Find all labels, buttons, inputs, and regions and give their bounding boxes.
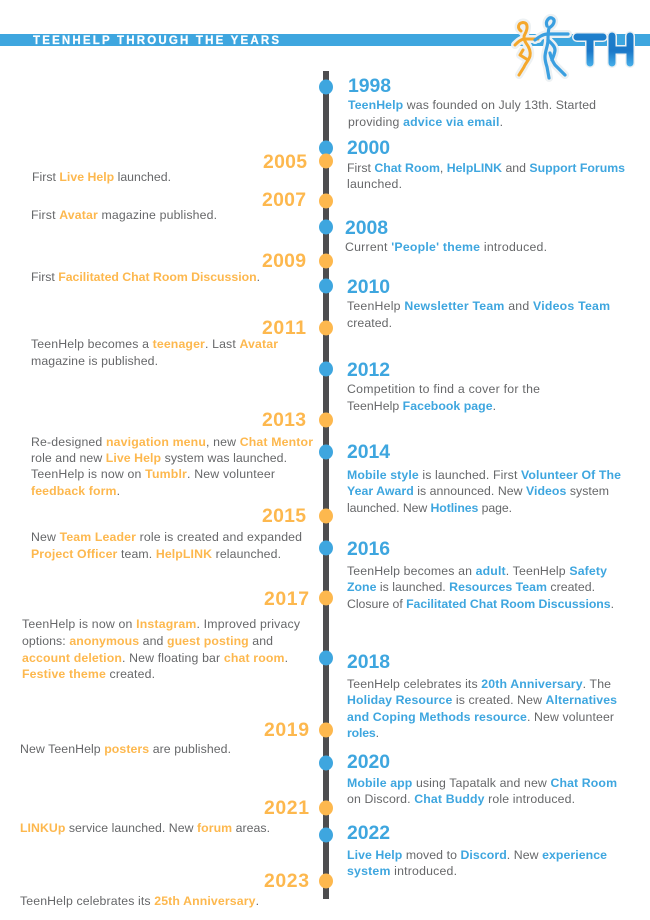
logo halo [515, 18, 630, 78]
entry 2000: 2000 [347, 137, 390, 159]
entry 2016: 2016 [347, 538, 390, 560]
entry 2009: First Facilitated Chat Room Discussion. [31, 270, 260, 284]
entry 2011: TeenHelp becomes a teenager. Last Avatar [31, 337, 278, 351]
entry 2017: account deletion. New floating bar chat room. [22, 651, 288, 665]
entry 2013: role and new Live Help system was launched. [31, 451, 287, 465]
entry 2023: TeenHelp celebrates its 25th Anniversary. [20, 894, 259, 908]
entry 2018: roles. [347, 726, 379, 740]
entry 2007 [31, 189, 306, 222]
entry 2021: LINKUp service launched. New forum areas. [20, 821, 270, 835]
title: TEENHELP THROUGH THE YEARS [33, 35, 279, 47]
entry 2020 [347, 751, 617, 806]
entry 2017: options: anonymous and guest posting and [22, 634, 273, 648]
entry 2005: 2005 [263, 151, 307, 173]
entry 2000: First Chat Room, HelpLINK and Support Forums [347, 161, 625, 175]
entry 2010 [347, 276, 610, 330]
entry 2016: Zone is launched. Resources Team created. [347, 580, 595, 594]
entry 2012: TeenHelp Facebook page. [347, 399, 496, 413]
orange figure [515, 22, 538, 75]
entry 2022: system introduced. [347, 864, 457, 878]
entry 2017 [22, 588, 309, 681]
entry 2014: Mobile style is launched. First Volunteer Of The [347, 468, 621, 482]
entry 2008: 2008 [345, 217, 388, 239]
entry 2018 [347, 651, 617, 740]
entry 2018: and Coping Methods resource. New volunteer [347, 710, 614, 724]
entry 2011: 2011 [262, 317, 306, 339]
blue figure [535, 18, 568, 78]
entry 2007: First Avatar magazine published. [31, 208, 217, 222]
entry 2010: created. [347, 316, 392, 330]
entry 2020: Mobile app using Tapatalk and new Chat Room [347, 776, 617, 790]
entry 2012 [347, 359, 540, 413]
entry 2021 [20, 797, 309, 835]
entry 2016: TeenHelp becomes an adult. TeenHelp Safety [347, 564, 607, 578]
entry 2016 [347, 538, 614, 611]
entry 2010: TeenHelp Newsletter Team and Videos Team [347, 299, 610, 313]
entry 2000: launched. [347, 177, 402, 191]
timeline dots: orange [319, 154, 333, 888]
entry 1998: 1998 [348, 75, 391, 97]
timeline dots: blue [319, 80, 333, 842]
entry 2020: on Discord. Chat Buddy role introduced. [347, 792, 575, 806]
entry 2014 [347, 441, 621, 515]
entry 2014: 2014 [347, 441, 390, 463]
entry 2019: New TeenHelp posters are published. [20, 742, 231, 756]
entry 2005 [32, 151, 307, 184]
entry 2009 [31, 250, 306, 284]
entry 2023 [20, 870, 309, 908]
timeline spine [323, 71, 329, 899]
entry 1998: providing advice via email. [348, 115, 503, 129]
entry 2014: launched. New Hotlines page. [347, 501, 512, 515]
entry 2013: TeenHelp is now on Tumblr. New volunteer [31, 467, 275, 481]
entry 2017: Festive theme created. [22, 667, 155, 681]
entry 2015 [31, 505, 306, 561]
entry 2022 [347, 822, 607, 878]
header bar [0, 34, 650, 46]
entry 2013: feedback form. [31, 484, 120, 498]
entry 2008: Current 'People' theme introduced. [345, 240, 547, 254]
entry 2000 [347, 137, 625, 191]
entry 2008 [345, 217, 547, 254]
entries: right column [345, 75, 625, 878]
entry 2014: Year Award is announced. New Videos system [347, 484, 609, 498]
entry 2013: Re-designed navigation menu, new Chat Mentor [31, 435, 313, 449]
entry 2019: 2019 [264, 719, 309, 741]
entry 1998 [348, 75, 596, 129]
entry 2022: Live Help moved to Discord. New experience [347, 848, 607, 862]
logo letters TH [577, 36, 630, 63]
entry 2015: 2015 [262, 505, 306, 527]
entry 2018: TeenHelp celebrates its 20th Anniversary. The [347, 677, 611, 691]
entries: left column [20, 151, 313, 908]
entry 2018: Holiday Resource is created. New Alternatives [347, 693, 617, 707]
entry 2023: 2023 [264, 870, 309, 892]
entry 2019 [20, 719, 309, 756]
entry 2017: TeenHelp is now on Instagram. Improved privacy [22, 617, 301, 631]
entry 2022: 2022 [347, 822, 390, 844]
entry 2007: 2007 [262, 189, 306, 211]
logo: TeenHelp [515, 18, 630, 78]
entry 2005: First Live Help launched. [32, 170, 171, 184]
entry 2011: magazine is published. [31, 354, 158, 368]
entry 2013 [31, 409, 313, 498]
entry 2012: 2012 [347, 359, 390, 381]
entry 2015: New Team Leader role is created and expanded [31, 530, 302, 544]
entry 2013: 2013 [262, 409, 306, 431]
entry 2017: 2017 [264, 588, 309, 610]
entry 2018: 2018 [347, 651, 390, 673]
entry 2012: Competition to find a cover for the [347, 382, 540, 396]
entry 2021: 2021 [264, 797, 309, 819]
entry 2010: 2010 [347, 276, 390, 298]
entry 2016: Closure of Facilitated Chat Room Discussions. [347, 597, 614, 611]
entry 2009: 2009 [262, 250, 306, 272]
entry 2011 [31, 317, 306, 368]
entry 2015: Project Officer team. HelpLINK relaunched. [31, 547, 281, 561]
entry 1998: TeenHelp was founded on July 13th. Started [348, 98, 596, 112]
entry 2020: 2020 [347, 751, 390, 773]
